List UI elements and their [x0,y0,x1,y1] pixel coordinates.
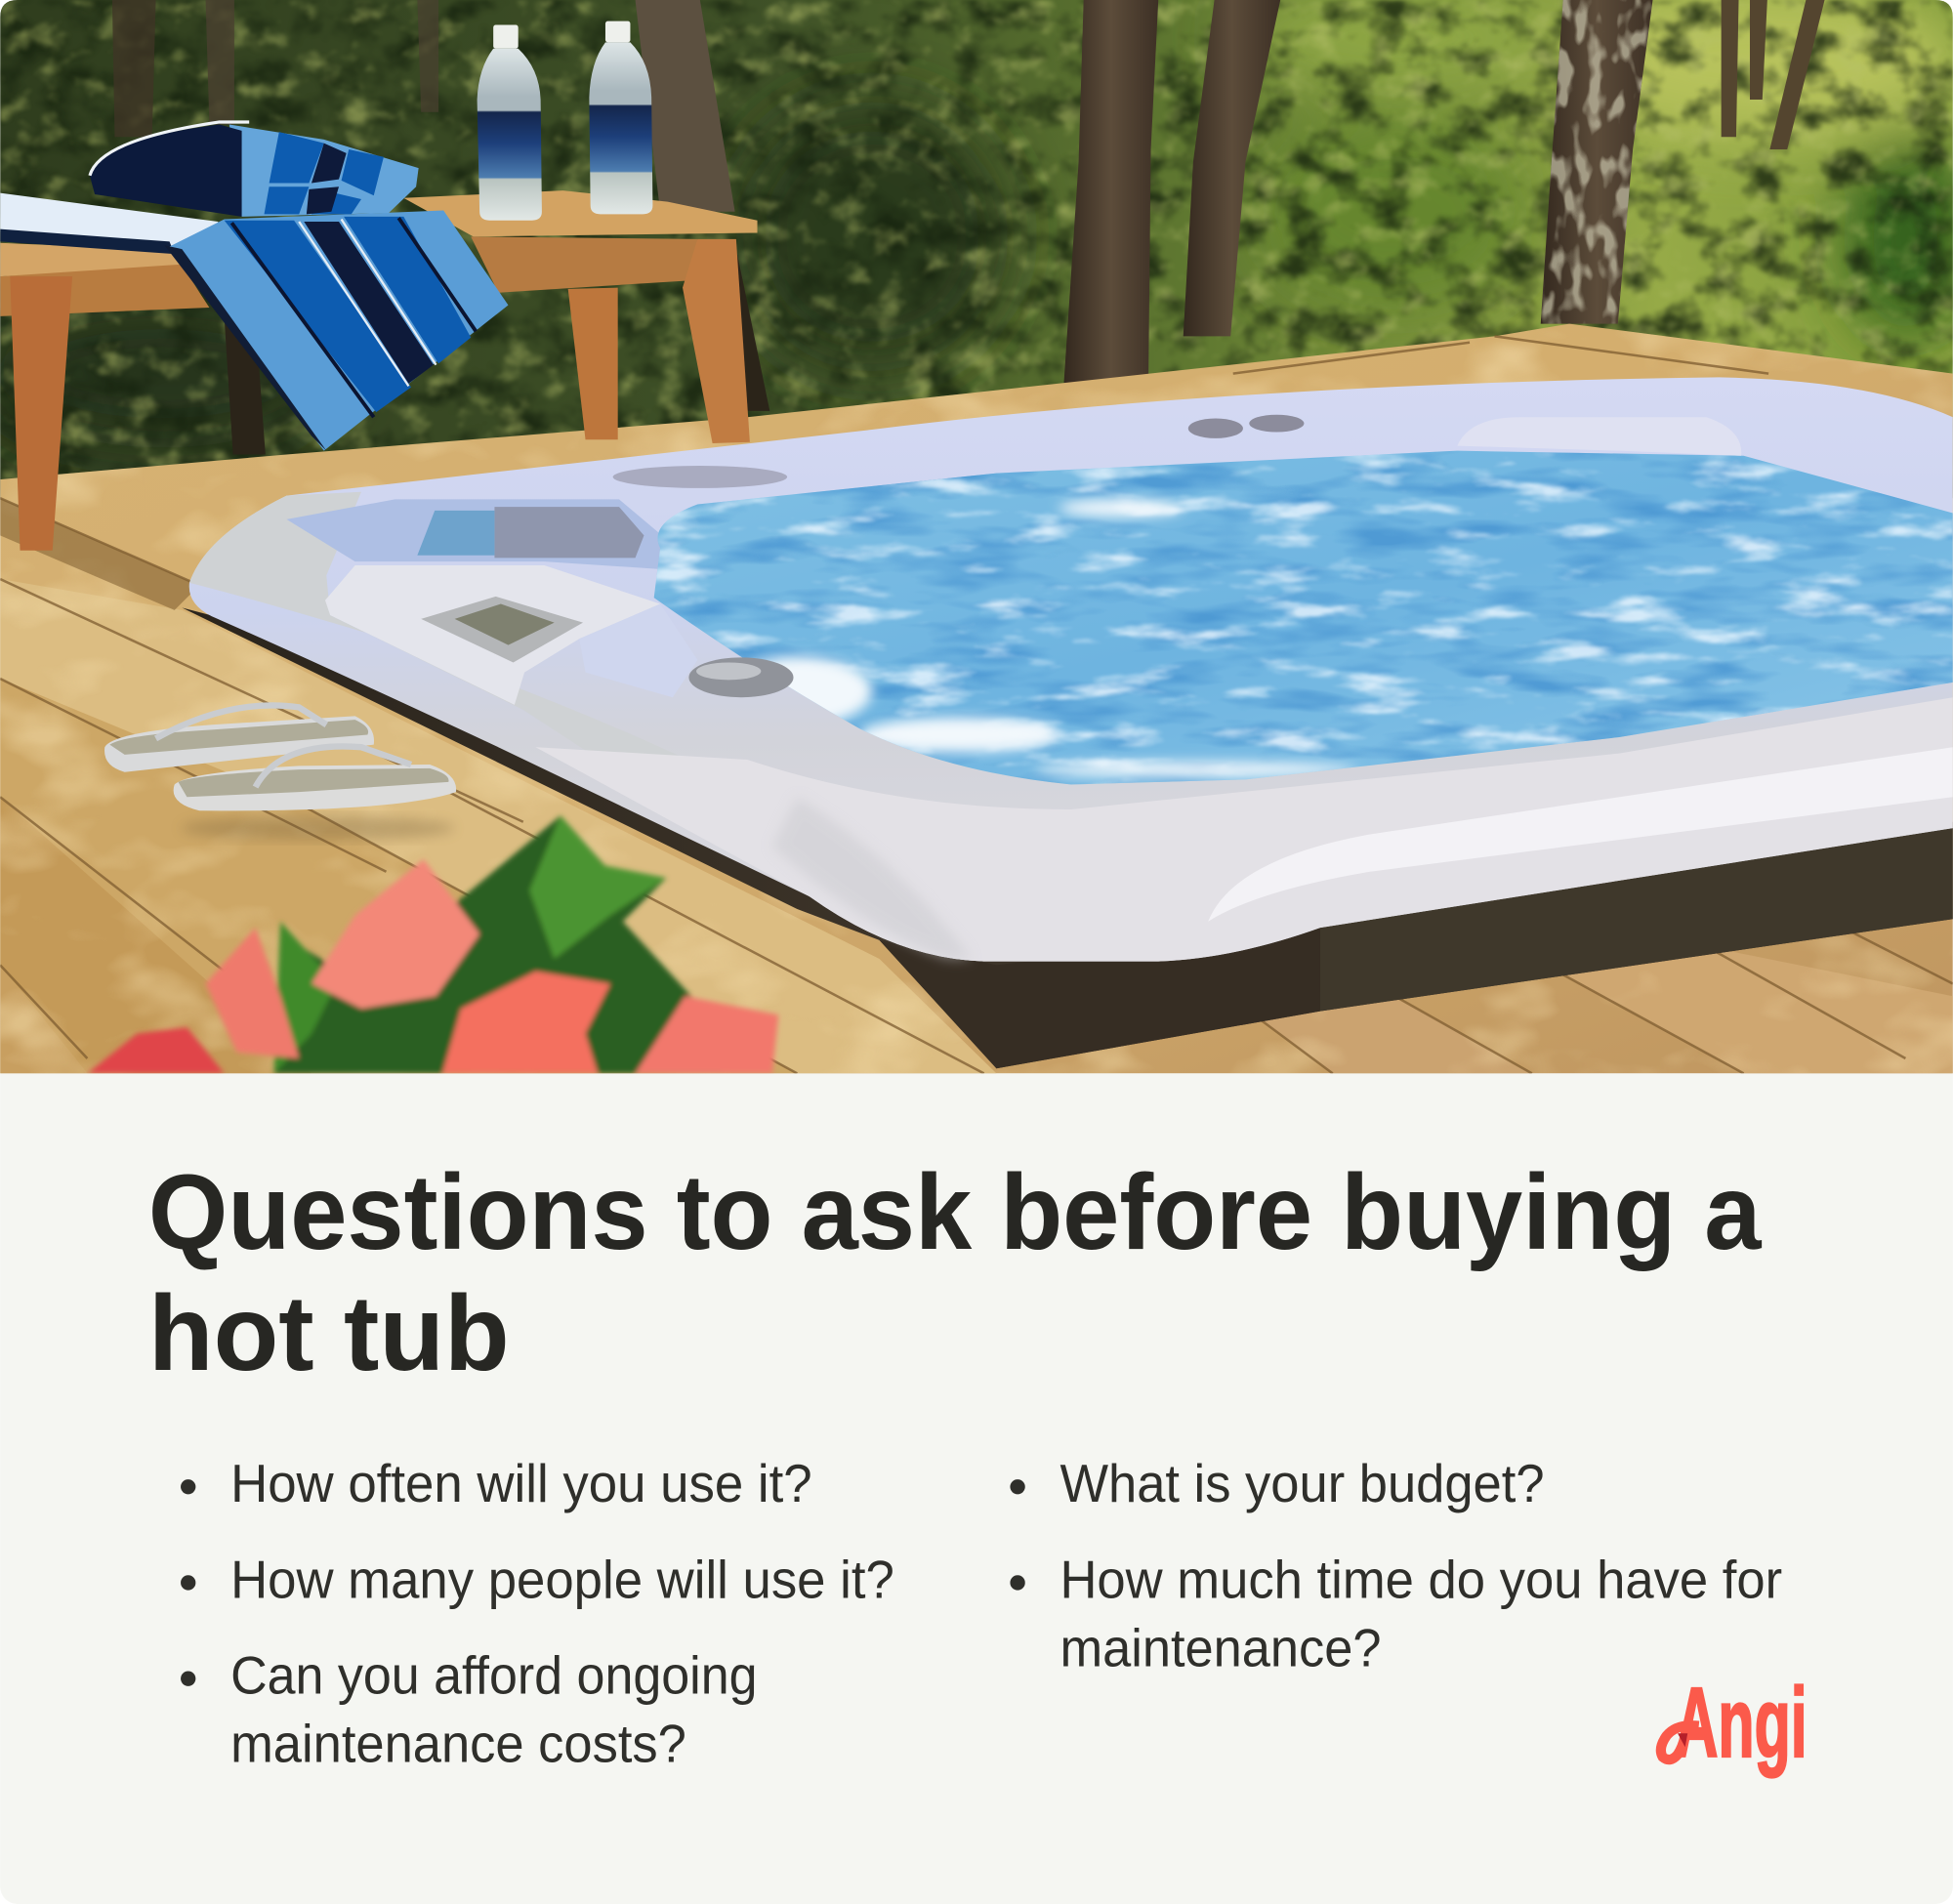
title: Questions to ask before buying a [148,1153,1762,1272]
ledge [325,565,660,705]
bullet list: left column: Can you afford ongoing [230,1644,758,1705]
wooden deck [0,324,1953,1073]
flip-flops [104,705,456,841]
bullet list: left column: How many people will use it? [230,1549,894,1609]
bullet list: right column: What is your budget? [1060,1453,1545,1513]
Angi logo: Angi [1675,1669,1808,1778]
wooden side table [0,190,758,551]
table shadow on deck [0,498,199,610]
pink flowers and leaves [87,815,778,1073]
rolled towel [229,125,419,217]
footwell [286,499,674,569]
shell shading [189,492,1953,962]
bullet list: right column: maintenance? [1060,1617,1381,1677]
bullet list: right column: How much time do you have for [1060,1549,1782,1609]
water bottles [478,21,652,221]
bullet list: left column [181,1453,894,1774]
photo: hot tub on a wooden deck [0,0,1953,1073]
tree trunks [112,0,1825,455]
bullet list: right column [1010,1453,1782,1677]
tub skirt [182,607,1953,1068]
foliage backdrop [0,0,1953,498]
water [623,435,1953,797]
beach towel [0,122,508,451]
Angi logo [1661,1669,1808,1778]
tub fittings [421,415,1741,697]
bullet list: left column: How often will you use it? [230,1453,812,1513]
title: hot tub [148,1274,510,1393]
tub shell [189,377,1953,962]
bullet list: left column: maintenance costs? [230,1714,686,1774]
title [148,1153,1762,1393]
